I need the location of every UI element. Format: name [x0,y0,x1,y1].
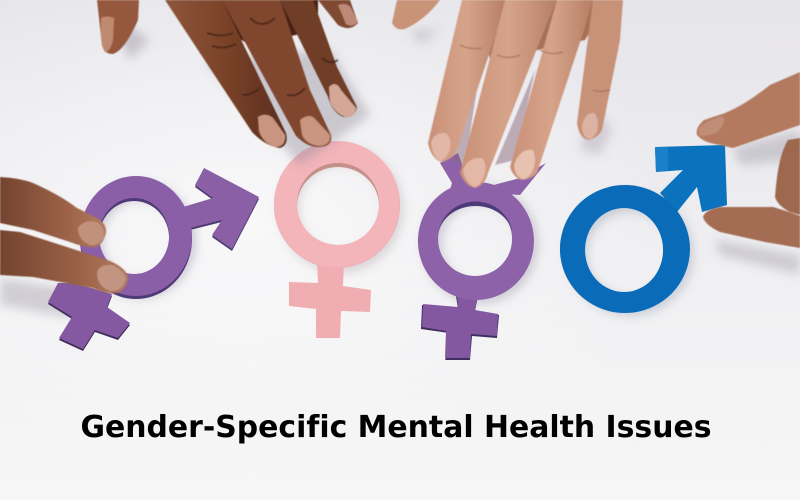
knuckle creases [460,45,610,92]
finger: dark middle [222,0,331,147]
finger: light first [428,0,505,162]
light hand base [480,0,610,60]
icon: dark hand with fingers from top [97,0,370,165]
nail: right upper [698,116,724,136]
nails: left fingers [78,221,104,245]
nail: dark small left [101,16,114,52]
finger: dark first [165,0,287,148]
title: Gender-Specific Mental Health Issues [80,410,712,445]
finger: light fourth [577,0,623,140]
finger: dark small left [97,0,139,54]
finger: right lower [703,207,800,248]
icon: right hand fingers [697,72,800,275]
icon: light hand with fingers from top [392,0,623,188]
finger: light small [392,0,440,29]
nails: dark fingers [258,115,285,147]
finger: right upper [697,72,800,148]
icon: left hand fingers [0,177,128,293]
finger: left upper [0,177,106,247]
finger: left lower [0,230,128,293]
icon: purple male-female symbol [48,168,259,351]
nails: light fingers [431,133,450,161]
dark hand base [175,0,318,45]
knuckle creases [207,18,338,95]
finger: dark fourth [280,0,357,117]
icon: blue male symbol [560,145,727,313]
nail: dark right small [338,4,358,26]
finger: dark right small [318,0,358,28]
icon: purple female symbol [418,153,546,360]
finger: light second [460,0,557,188]
finger: light third [510,0,593,180]
icon: pink female symbol [274,141,400,338]
finger: right thumb [775,138,800,215]
